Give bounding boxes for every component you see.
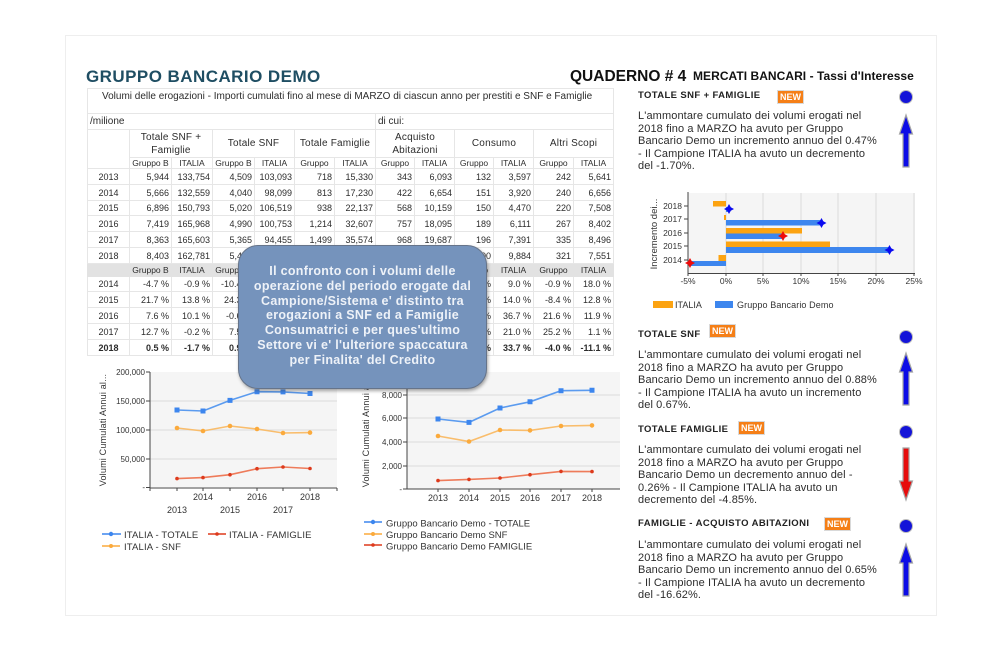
- legend: bar chart: [653, 300, 834, 310]
- chart: ITALIA line chart: 2013: [167, 505, 187, 515]
- text block: totale snf + famiglie: [638, 110, 877, 172]
- data table: volumi delle erogazioni: 240: [556, 188, 571, 198]
- callout: Il confronto con i volumi delle: [269, 264, 456, 278]
- data table: volumi delle erogazioni: 32,607: [345, 218, 373, 228]
- text block: totale snf + famiglie: - Il Campione ITALIA ha avuto un decremento: [638, 148, 865, 160]
- callout: Consumatrici e per ques'ultimo: [265, 323, 460, 337]
- data table: volumi delle erogazioni: 4,040: [229, 188, 252, 198]
- data table: volumi delle erogazioni: 718: [317, 172, 332, 182]
- data table: volumi delle erogazioni: 165,968: [177, 218, 210, 228]
- data table: volumi delle erogazioni: Volumi delle erogazioni - Importi cumulati fino al mese di MARZO di ciascun anno per prestiti e SNF e Famiglie: [102, 91, 592, 102]
- data table: volumi delle erogazioni: -4.7 %: [143, 279, 169, 289]
- data table: volumi delle erogazioni: di cui:: [378, 116, 404, 126]
- data table: volumi delle erogazioni: ITALIA: [581, 158, 606, 168]
- data table: volumi delle erogazioni: 4,509: [229, 172, 252, 182]
- legend: Gruppo Bancario Demo line chart: Gruppo Bancario Demo - TOTALE: [386, 518, 530, 530]
- data table: volumi delle erogazioni: ITALIA: [501, 265, 526, 275]
- data table: volumi delle erogazioni: 220: [556, 203, 571, 213]
- data table: volumi delle erogazioni: 6,896: [146, 203, 169, 213]
- legend: ITALIA line chart: ITALIA - TOTALE: [124, 530, 198, 541]
- data table: volumi delle erogazioni: Gruppo B: [132, 265, 169, 275]
- chart: Gruppo Bancario Demo line chart: 2014: [459, 493, 479, 503]
- data table: volumi delle erogazioni: 1.1 %: [588, 326, 611, 336]
- data table: volumi delle erogazioni: 6,093: [429, 172, 452, 182]
- data table: volumi delle erogazioni: Gruppo: [381, 158, 409, 168]
- data table: volumi delle erogazioni: 200: [476, 250, 491, 260]
- data table: volumi delle erogazioni: Gruppo: [539, 265, 568, 275]
- chart: incremento bar chart: 2016: [663, 228, 682, 238]
- data table: volumi delle erogazioni: 21.7 %: [141, 294, 169, 304]
- title: GRUPPO BANCARIO DEMO: [86, 67, 321, 86]
- data table: volumi delle erogazioni: 9,884: [508, 250, 531, 260]
- data table: volumi delle erogazioni: 132: [476, 172, 491, 182]
- data table: volumi delle erogazioni: Gruppo: [460, 265, 488, 275]
- text block: totale famiglie: 0.26% - Il Campione ITALIA ha avuto un: [638, 482, 838, 494]
- data table: volumi delle erogazioni: 1,499: [309, 234, 332, 244]
- chart: incremento bar chart: 20%: [867, 276, 885, 286]
- data table: volumi delle erogazioni: ITALIA: [342, 158, 368, 168]
- data table: volumi delle erogazioni: 106,519: [259, 203, 292, 213]
- callout: Campione/Sistema e' distinto tra: [261, 294, 464, 308]
- data table: volumi delle erogazioni: 321: [556, 250, 571, 260]
- legend: ITALIA line chart: ITALIA - SNF: [124, 542, 181, 553]
- chart: Gruppo Bancario Demo line chart: 2013: [428, 493, 448, 503]
- data table: volumi delle erogazioni: 94,455: [264, 234, 292, 244]
- text block: totale snf: del 0.67%.: [638, 399, 691, 411]
- data table: volumi delle erogazioni: ITALIA: [262, 158, 287, 168]
- chart: ITALIA line chart: 2014: [193, 492, 213, 502]
- data table: volumi delle erogazioni: Gruppo B: [215, 158, 252, 168]
- data table: volumi delle erogazioni: 1,214: [309, 218, 332, 228]
- icon: blue status dot 2: [900, 330, 912, 344]
- data table: volumi delle erogazioni: -0.7 %: [465, 294, 491, 304]
- data table: volumi delle erogazioni: -0.9 %: [545, 279, 571, 289]
- data table: volumi delle erogazioni: ITALIA: [581, 265, 606, 275]
- data table: volumi delle erogazioni: Consumo: [472, 138, 516, 149]
- data table: volumi delle erogazioni: 132,559: [177, 188, 210, 198]
- data table: volumi delle erogazioni: 14.4 %: [463, 279, 491, 289]
- data table: volumi delle erogazioni: -0.6 %: [226, 310, 252, 320]
- chart: ITALIA line chart: 100,000: [116, 426, 146, 435]
- data table: volumi delle erogazioni: 2018: [98, 250, 119, 260]
- data table: volumi delle erogazioni: 4,990: [229, 218, 252, 228]
- data table: volumi delle erogazioni: 10,159: [424, 203, 452, 213]
- chart: ITALIA line chart: -: [142, 483, 145, 492]
- icon: blue status dot 4: [900, 520, 912, 532]
- chart: Gruppo Bancario Demo line chart: 8,000: [382, 391, 403, 400]
- data table: volumi delle erogazioni: Gruppo B: [132, 158, 169, 168]
- data table: volumi delle erogazioni: 757: [397, 218, 412, 228]
- legend: bar chart: Gruppo Bancario Demo: [737, 300, 834, 310]
- data table: volumi delle erogazioni: 150,793: [177, 203, 210, 213]
- data table: volumi delle erogazioni: 189: [476, 218, 491, 228]
- data table: volumi delle erogazioni: 10.1 %: [182, 310, 210, 320]
- data table: volumi delle erogazioni: 335: [556, 234, 571, 244]
- badge: new 1: NEW: [780, 92, 801, 102]
- data table: volumi delle erogazioni: 21.6 %: [543, 310, 571, 320]
- data table: volumi delle erogazioni: 2013: [98, 172, 119, 182]
- text block: totale snf: - Il Campione ITALIA ha avuto un incremento: [638, 387, 861, 399]
- data table: volumi delle erogazioni: Gruppo: [460, 158, 488, 168]
- data table: volumi delle erogazioni: -0.2 %: [184, 326, 210, 336]
- heading: totale snf + famiglie: TOTALE SNF + FAMIGLIE: [638, 90, 760, 101]
- data table: volumi delle erogazioni: -11.1 %: [581, 342, 611, 352]
- data table: volumi delle erogazioni: 6,654: [429, 188, 452, 198]
- data table: volumi delle erogazioni: 151: [476, 188, 491, 198]
- data table: volumi delle erogazioni: 2017: [98, 234, 119, 244]
- data table: volumi delle erogazioni: 5,641: [589, 172, 611, 182]
- text block: famiglie acquisto abitazioni: - Il Campione ITALIA ha avuto un decremento: [638, 577, 865, 589]
- data table: volumi delle erogazioni: 15,330: [345, 172, 373, 182]
- text block: famiglie acquisto abitazioni: Bancario Demo un incremento annuo del 0.65%: [638, 564, 877, 576]
- data table: volumi delle erogazioni: 6,111: [510, 218, 531, 228]
- data table: volumi delle erogazioni: 2016: [98, 310, 119, 320]
- text block: totale famiglie: 2018 fino a MARZO ha avuto per Gruppo: [638, 457, 843, 469]
- data table: volumi delle erogazioni: 165,603: [177, 234, 210, 244]
- data table: volumi delle erogazioni: 2014: [98, 279, 119, 289]
- data table: volumi delle erogazioni: 3,920: [508, 188, 531, 198]
- chart: incremento bar chart: 5%: [757, 276, 770, 286]
- text block: totale snf: 2018 fino a MARZO ha avuto per Gruppo: [638, 362, 843, 374]
- data table: volumi delle erogazioni: 7.5 %: [229, 326, 252, 336]
- chart: Gruppo Bancario Demo line chart: 2,000: [382, 462, 403, 471]
- data table: volumi delle erogazioni: 162,781: [177, 250, 210, 260]
- data table: volumi delle erogazioni: 18.0 %: [583, 279, 611, 289]
- chart: ITALIA line chart: 2018: [300, 492, 320, 502]
- data table: volumi delle erogazioni: ITALIA: [422, 158, 447, 168]
- text block: totale famiglie: decremento del -4.85%.: [638, 494, 757, 506]
- data table: volumi delle erogazioni: 2.0 %: [468, 342, 491, 352]
- data table: volumi delle erogazioni: /milione: [90, 116, 124, 126]
- data table: volumi delle erogazioni: 98,099: [264, 188, 292, 198]
- data table: volumi delle erogazioni: Altri Scopi: [550, 138, 597, 149]
- legend: ITALIA line chart: ITALIA - FAMIGLIE: [229, 530, 312, 541]
- legend: bar chart: ITALIA: [675, 300, 702, 310]
- chart: Gruppo Bancario Demo line chart: [361, 372, 620, 503]
- panel: page frame: [65, 35, 937, 616]
- data table: volumi delle erogazioni: ITALIA: [501, 158, 526, 168]
- legend: Gruppo Bancario Demo line chart: Gruppo Bancario Demo SNF: [386, 530, 508, 541]
- data table: volumi delle erogazioni: 103,093: [259, 172, 292, 182]
- data table: volumi delle erogazioni: 14.0 %: [503, 294, 531, 304]
- chart: incremento bar chart: 2018: [663, 201, 682, 211]
- data table: volumi delle erogazioni: 150: [476, 203, 491, 213]
- chart: Gruppo Bancario Demo line chart: 4,000: [382, 438, 403, 447]
- data table: volumi delle erogazioni: 3,597: [508, 172, 531, 182]
- legend: ITALIA line chart: [102, 530, 312, 553]
- chart: ITALIA line chart: 2017: [273, 505, 293, 515]
- data table: volumi delle erogazioni: 422: [397, 188, 412, 198]
- chart: ITALIA line chart: 2015: [220, 505, 240, 515]
- text block: totale snf + famiglie: del -1.70%.: [638, 160, 695, 172]
- data table: volumi delle erogazioni: -4.0 %: [545, 342, 571, 352]
- data table: volumi delle erogazioni: 7,419: [146, 218, 169, 228]
- chart: incremento bar chart: 2017: [663, 214, 682, 224]
- chart: incremento bar chart: 0%: [720, 276, 733, 286]
- data table: volumi delle erogazioni: 5,666: [146, 188, 169, 198]
- data table: volumi delle erogazioni: Gruppo: [539, 158, 568, 168]
- badge: new 3: [738, 421, 765, 435]
- data table: volumi delle erogazioni: 7.6 %: [146, 310, 169, 320]
- data table: volumi delle erogazioni: 2017: [98, 326, 119, 336]
- legend: Gruppo Bancario Demo line chart: Gruppo Bancario Demo FAMIGLIE: [386, 542, 532, 552]
- chart: ITALIA line chart: [98, 368, 337, 515]
- data table: volumi delle erogazioni: 5,020: [229, 203, 252, 213]
- chart: incremento bar chart: -5%: [680, 276, 696, 286]
- chart: incremento bar chart: Incremento dei...: [649, 199, 660, 269]
- data table: volumi delle erogazioni: 2015: [98, 294, 119, 304]
- chart: ITALIA line chart: 2016: [247, 492, 267, 502]
- chart: ITALIA line chart: 200,000: [116, 368, 146, 377]
- data table: volumi delle erogazioni: 2015: [98, 203, 119, 213]
- chart: Gruppo Bancario Demo line chart: 2015: [490, 493, 510, 503]
- callout: operazione del periodo erogate dal: [254, 279, 471, 293]
- badge: new 1: [777, 90, 804, 104]
- chart: incremento bar chart: 10%: [792, 276, 810, 286]
- data table: volumi delle erogazioni: 813: [317, 188, 332, 198]
- icon: red down arrow: [900, 448, 912, 500]
- data table: volumi delle erogazioni: 5,944: [146, 172, 169, 182]
- icon: blue status dot 3: [900, 426, 912, 438]
- badge: new 4: [824, 517, 851, 531]
- data table: volumi delle erogazioni: -10.4 %: [221, 279, 252, 289]
- text block: totale famiglie: [638, 444, 861, 506]
- data table: volumi delle erogazioni: 12.7 %: [141, 326, 169, 336]
- data table: volumi delle erogazioni: ITALIA: [179, 265, 205, 275]
- data table: volumi delle erogazioni: 9.0 %: [508, 279, 531, 289]
- text block: famiglie acquisto abitazioni: del -16.62%.: [638, 589, 701, 601]
- data table: volumi delle erogazioni: -1.7 %: [184, 342, 210, 352]
- data table: volumi delle erogazioni: 19,687: [424, 234, 452, 244]
- data table: volumi delle erogazioni: 13.8 %: [182, 294, 210, 304]
- callout: [238, 245, 487, 389]
- chart: Gruppo Bancario Demo line chart: 2016: [520, 493, 540, 503]
- chart: ITALIA line chart: 150,000: [116, 397, 146, 406]
- chart: incremento bar chart: 15%: [829, 276, 847, 286]
- icon: up arrow 2: [900, 353, 912, 405]
- data table: volumi delle erogazioni: 5,365: [229, 234, 252, 244]
- data table: volumi delle erogazioni: [87, 88, 614, 356]
- heading: totale snf: TOTALE SNF: [638, 329, 701, 340]
- text block: totale famiglie: Bancario Demo un decremento annuo del -: [638, 469, 853, 481]
- chart: incremento bar chart: 2015: [663, 241, 682, 251]
- data table: volumi delle erogazioni: 568: [397, 203, 412, 213]
- callout: Settore vi e' l'ulteriore spaccatura: [257, 338, 468, 352]
- data table: volumi delle erogazioni: -8.4 %: [545, 294, 571, 304]
- data table: volumi delle erogazioni: 2016: [98, 218, 119, 228]
- callout: per Finalita' del Credito: [290, 352, 435, 366]
- chart: Gruppo Bancario Demo line chart: Volumi Cumulati Annui al...: [361, 375, 371, 487]
- heading: totale famiglie: TOTALE FAMIGLIE: [638, 424, 728, 435]
- chart: incremento bar chart: 25%: [905, 276, 923, 286]
- chart: incremento bar chart: 2014: [663, 255, 682, 265]
- data table: volumi delle erogazioni: 36.7 %: [503, 310, 531, 320]
- data table: volumi delle erogazioni: 24.3 %: [224, 294, 252, 304]
- data table: volumi delle erogazioni: 8,496: [589, 234, 611, 244]
- data table: volumi delle erogazioni: Totale SNF + Famiglie: [141, 132, 201, 156]
- badge: new 4: NEW: [827, 519, 848, 529]
- chart: Gruppo Bancario Demo line chart: 6,000: [382, 414, 403, 423]
- chart: ITALIA line chart: 50,000: [121, 455, 146, 464]
- data table: volumi delle erogazioni: Gruppo B: [215, 265, 252, 275]
- icon: up arrow 1: [900, 115, 912, 167]
- data table: volumi delle erogazioni: 0.5 %: [146, 342, 169, 352]
- text block: totale snf + famiglie: L'ammontare cumulato dei volumi erogati nel: [638, 110, 861, 122]
- data table: volumi delle erogazioni: 938: [317, 203, 332, 213]
- heading: quaderno: QUADERNO # 4: [570, 68, 686, 85]
- text block: totale snf + famiglie: Bancario Demo un incremento annuo del 0.47%: [638, 135, 877, 147]
- text block: famiglie acquisto abitazioni: [638, 539, 877, 601]
- data table: volumi delle erogazioni: 0.9 %: [229, 342, 252, 352]
- text block: totale snf: [638, 349, 877, 411]
- data table: volumi delle erogazioni: 242: [556, 172, 571, 182]
- data table: volumi delle erogazioni: 12.8 %: [583, 294, 611, 304]
- data table: volumi delle erogazioni: 196: [476, 234, 491, 244]
- icon: blue status dot 1: [900, 90, 912, 104]
- heading: mercati bancari: MERCATI BANCARI - Tassi d'Interesse: [693, 69, 914, 83]
- chart: ITALIA line chart: Volumi Cumulati Annui al...: [98, 374, 108, 486]
- text block: totale snf: Bancario Demo un incremento annuo del 0.88%: [638, 374, 877, 386]
- data table: volumi delle erogazioni: 343: [397, 172, 412, 182]
- data table: volumi delle erogazioni: 18,095: [424, 218, 452, 228]
- data table: volumi delle erogazioni: 33.7 %: [503, 342, 531, 352]
- text block: totale famiglie: L'ammontare cumulato dei volumi erogati nel: [638, 444, 861, 456]
- data table: volumi delle erogazioni: 7,508: [589, 203, 611, 213]
- data table: volumi delle erogazioni: 11.9 %: [584, 310, 611, 320]
- data table: volumi delle erogazioni: 133,754: [177, 172, 210, 182]
- data table: volumi delle erogazioni: 26.0 %: [463, 310, 491, 320]
- data table: volumi delle erogazioni: 21.0 %: [503, 326, 531, 336]
- data table: volumi delle erogazioni: 2018: [98, 342, 119, 352]
- data table: volumi delle erogazioni: 3.7 %: [468, 326, 491, 336]
- badge: new 3: NEW: [741, 423, 762, 433]
- data table: volumi delle erogazioni: -0.9 %: [184, 279, 210, 289]
- data table: volumi delle erogazioni: Gruppo: [300, 158, 329, 168]
- icon: up arrow 4: [900, 544, 912, 596]
- data table: volumi delle erogazioni: 8,363: [146, 234, 169, 244]
- data table: volumi delle erogazioni: 4,470: [508, 203, 531, 213]
- text block: famiglie acquisto abitazioni: 2018 fino a MARZO ha avuto per Gruppo: [638, 552, 843, 564]
- badge: new 2: NEW: [712, 326, 733, 336]
- data table: volumi delle erogazioni: 5,412: [229, 250, 252, 260]
- data table: volumi delle erogazioni: Acquisto Abitazioni: [392, 132, 438, 156]
- legend: Gruppo Bancario Demo line chart: [364, 518, 532, 552]
- chart: Gruppo Bancario Demo line chart: -: [399, 485, 402, 494]
- badge: new 2: [709, 324, 736, 338]
- data table: volumi delle erogazioni: Totale SNF: [228, 138, 279, 149]
- data table: volumi delle erogazioni: 100,753: [259, 218, 292, 228]
- text block: totale snf: L'ammontare cumulato dei volumi erogati nel: [638, 349, 861, 361]
- text block: famiglie acquisto abitazioni: L'ammontare cumulato dei volumi erogati nel: [638, 539, 861, 551]
- data table: volumi delle erogazioni: 8,403: [146, 250, 169, 260]
- data table: volumi delle erogazioni: Totale Famiglie: [300, 138, 370, 149]
- chart: Gruppo Bancario Demo line chart: 2017: [551, 493, 571, 503]
- data table: volumi delle erogazioni: 7,391: [508, 234, 531, 244]
- chart: incremento bar chart: [649, 192, 923, 286]
- data table: volumi delle erogazioni: ITALIA: [179, 158, 205, 168]
- data table: volumi delle erogazioni: 267: [556, 218, 571, 228]
- data table: volumi delle erogazioni: 7,551: [589, 250, 611, 260]
- data table: volumi delle erogazioni: 17,230: [345, 188, 373, 198]
- data table: volumi delle erogazioni: 22,137: [345, 203, 373, 213]
- data table: volumi delle erogazioni: 6,656: [589, 188, 611, 198]
- data table: volumi delle erogazioni: 35,574: [345, 234, 373, 244]
- data table: volumi delle erogazioni: 25.2 %: [543, 326, 571, 336]
- chart: Gruppo Bancario Demo line chart: 2018: [582, 493, 602, 503]
- data table: volumi delle erogazioni: 8,402: [589, 218, 611, 228]
- data table: volumi delle erogazioni: 968: [397, 234, 412, 244]
- heading: famiglie acquisto abitazioni: FAMIGLIE - ACQUISTO ABITAZIONI: [638, 518, 809, 529]
- text block: totale snf + famiglie: 2018 fino a MARZO ha avuto per Gruppo: [638, 123, 843, 135]
- callout: erogazioni a SNF ed a Famiglie: [266, 308, 459, 322]
- data table: volumi delle erogazioni: 2014: [98, 188, 119, 198]
